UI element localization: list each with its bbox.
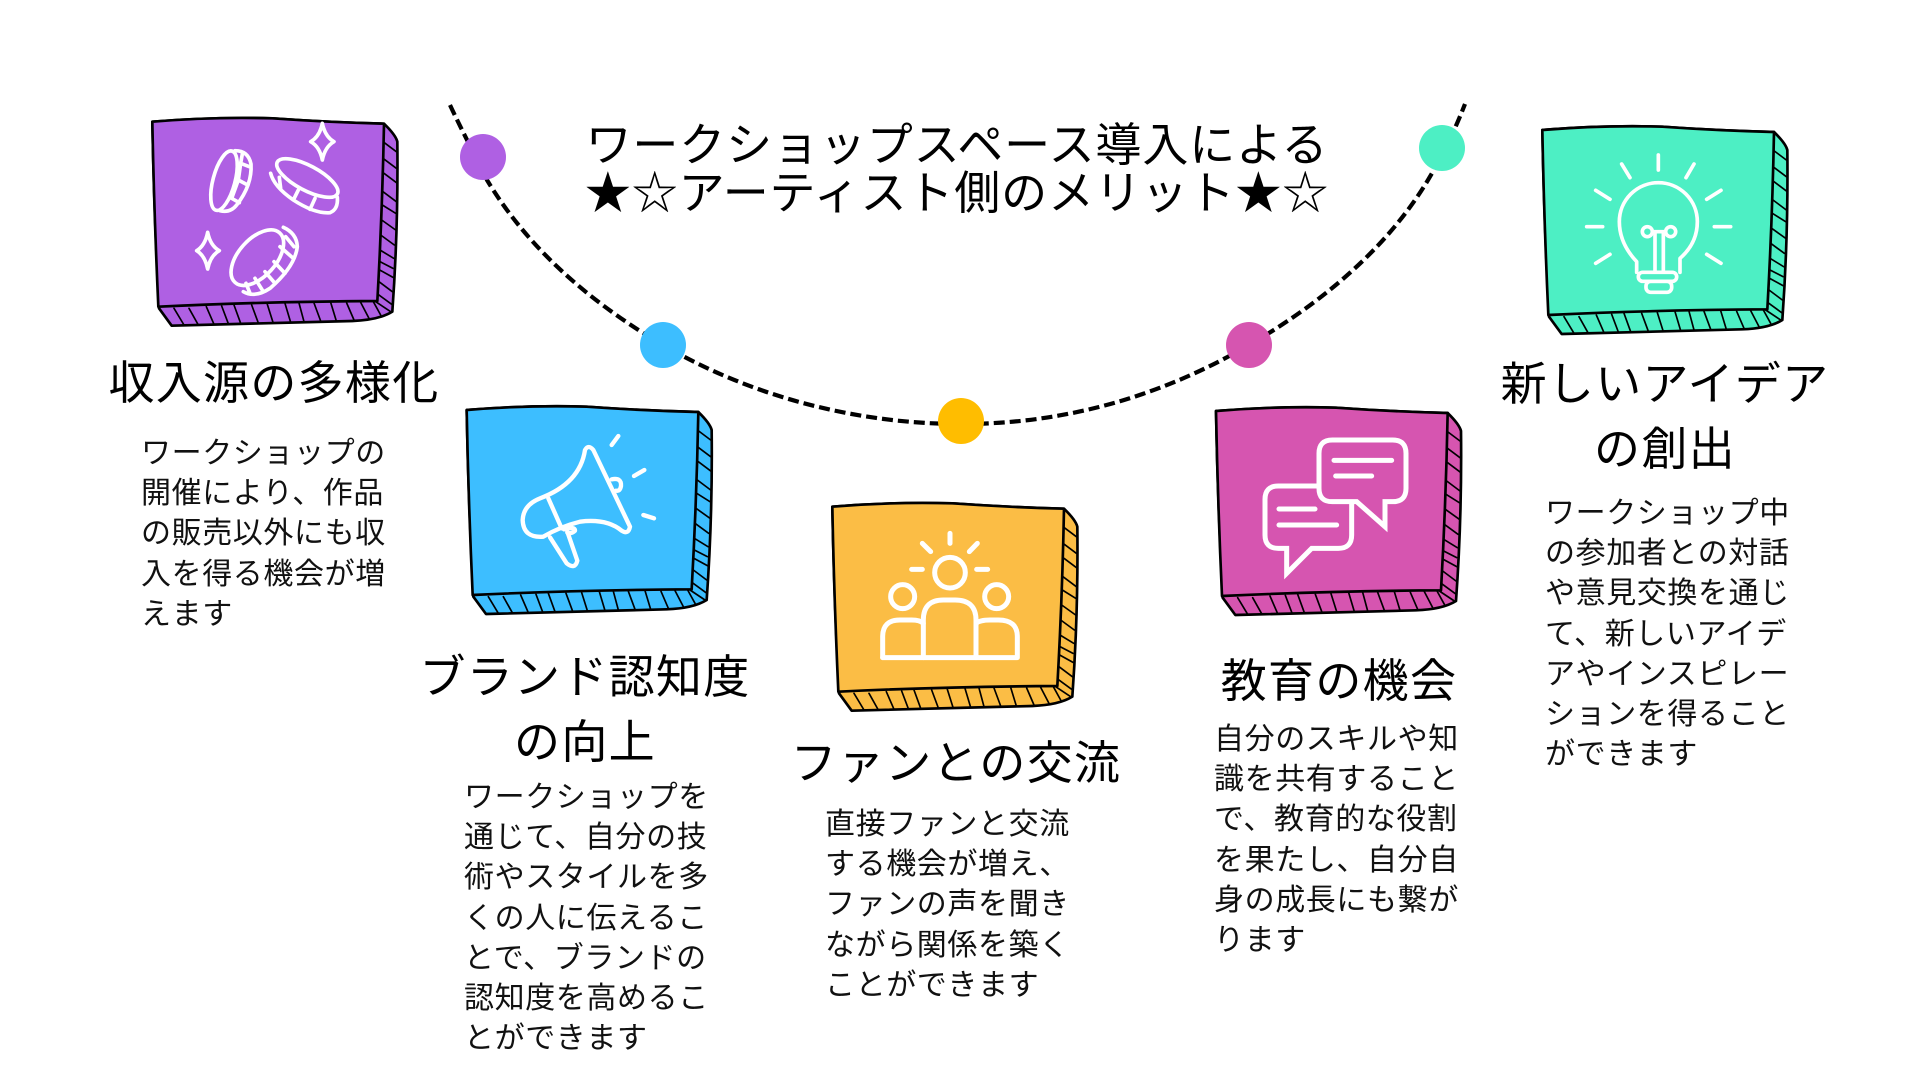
text block: ワークショップを [464, 781, 709, 814]
icon: light bulb card [1541, 124, 1789, 336]
text block: を果たし、自分自 [1214, 844, 1459, 877]
icon: people card [831, 502, 1079, 712]
text block: ファンの声を聞き [825, 888, 1070, 921]
text block: 術やスタイルを多 [464, 861, 709, 894]
text block: ことができます [825, 969, 1039, 1002]
text block: で、教育的な役割 [1214, 803, 1458, 836]
text block: 身の成長にも繋が [1214, 884, 1459, 917]
text block: 識を共有すること [1214, 763, 1459, 796]
card template definitions [0, 0, 4, 4]
text block: 通じて、自分の技 [464, 821, 707, 854]
text block: ながら関係を築く [825, 929, 1070, 962]
heading: ファンとの交流 [791, 737, 1121, 789]
text block: ワークショップの [141, 437, 386, 470]
panel: 新しいアイデアの創出 [1501, 124, 1829, 771]
text block: 直接ファンと交流 [825, 808, 1070, 841]
text block: ができます [1545, 738, 1698, 771]
heading: 新しいアイデア [1501, 358, 1829, 410]
text block [464, 781, 709, 1055]
text block: ションを得ること [1545, 698, 1790, 731]
title: ワークショップスペース導入による [586, 119, 1328, 171]
text block [1545, 497, 1790, 771]
heading: ブランド認知度 [419, 651, 751, 703]
heading: 教育の機会 [1221, 655, 1457, 707]
text block [141, 437, 386, 631]
text block: くの人に伝えるこ [464, 902, 708, 935]
text block: ワークショップ中 [1545, 497, 1790, 530]
text block [825, 808, 1070, 1002]
panel: ファンとの交流 [791, 502, 1121, 1002]
text block [1214, 723, 1459, 957]
panel: 収入源の多様化 [108, 116, 440, 631]
panel: ブランド認知度の向上 [419, 404, 751, 1055]
panel: 教育の機会 [1214, 406, 1462, 957]
text block: とができます [464, 1022, 648, 1055]
text block: とで、ブランドの [464, 942, 707, 975]
heading: の創出 [1594, 423, 1736, 475]
heading: 収入源の多様化 [108, 357, 440, 409]
heading: の向上 [514, 716, 656, 768]
heading [1501, 358, 1829, 475]
text block: 入を得る機会が増 [141, 558, 386, 591]
text block: の参加者との対話 [1545, 537, 1790, 570]
text block: する機会が増え、 [825, 848, 1070, 881]
text block: て、新しいアイデ [1545, 618, 1787, 651]
text block: アやインスピレー [1545, 658, 1789, 691]
heading [419, 651, 751, 768]
text block: 自分のスキルや知 [1214, 723, 1459, 756]
text block: ります [1214, 924, 1306, 957]
title [585, 119, 1329, 219]
text block: えます [141, 598, 233, 631]
icon: coins card [151, 116, 399, 327]
text block: の販売以外にも収 [141, 517, 386, 550]
icon: megaphone card [465, 404, 714, 616]
text block: 認知度を高めるこ [464, 982, 709, 1015]
title: ★☆アーティスト側のメリット★☆ [585, 167, 1329, 219]
text block: 開催により、作品 [141, 477, 384, 510]
icon: chat bubbles card [1214, 406, 1462, 616]
text block: や意見交換を通じ [1545, 577, 1790, 610]
